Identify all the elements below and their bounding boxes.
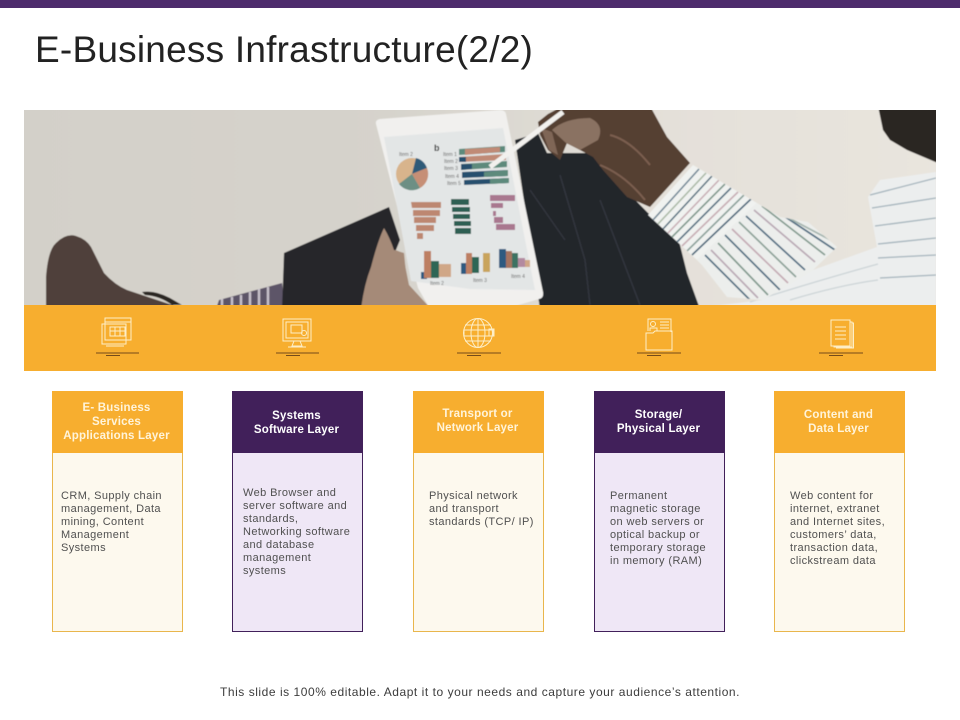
card body: Physical network (429, 490, 518, 502)
card: systems software (232, 391, 363, 632)
tablet labels: Item 3 (473, 278, 487, 284)
card body: and transport (429, 503, 499, 515)
shirt cuff (648, 165, 757, 260)
card: transport or network (413, 391, 544, 632)
card header: Services (92, 416, 141, 428)
card body: mining, Content (61, 516, 144, 528)
card header: Data Layer (808, 423, 869, 435)
trousers: near leg (282, 207, 400, 309)
boot (46, 235, 184, 309)
wall (20, 106, 940, 309)
tiny icon captions (96, 353, 863, 356)
card header: Systems (272, 410, 321, 422)
tablet labels: Item 4 (445, 174, 459, 180)
icon: application window (102, 318, 131, 346)
card header: Physical Layer (617, 423, 700, 435)
card: content and data (774, 391, 905, 632)
tablet labels: Item 2 (430, 281, 444, 287)
pie chart (396, 158, 428, 190)
footer note: This slide is 100% editable. Adapt it to your needs and capture your audience’s attention. (220, 685, 740, 699)
right hand (538, 106, 690, 207)
stylus (490, 112, 563, 167)
card body: and Internet sites, (790, 516, 885, 528)
salmon bars (411, 202, 441, 239)
card body: transaction data, (790, 542, 878, 554)
sock (216, 283, 285, 309)
tablet screen (384, 128, 535, 290)
trousers: torso and far leg (515, 133, 700, 309)
card body: on web servers or (610, 516, 704, 528)
card header: Content and (804, 409, 873, 421)
card: e-business services (52, 391, 183, 632)
card: storage physical (594, 391, 725, 632)
card body: and database (243, 539, 314, 551)
card body: management, Data (61, 503, 161, 515)
column bars (421, 249, 530, 279)
card body: standards, (243, 513, 298, 525)
icon: desktop monitor (283, 319, 311, 347)
card header (413, 391, 544, 453)
tablet labels: Item 3 (444, 166, 458, 172)
card header: E- Business (82, 402, 151, 414)
shirt sleeve (697, 203, 840, 300)
card body: optical backup or (610, 529, 700, 541)
card body: in memory (RAM) (610, 555, 702, 567)
card header: Storage/ (635, 409, 682, 421)
card body: server software and (243, 500, 347, 512)
card body: clickstream data (790, 555, 876, 567)
tablet labels: Item 5 (447, 181, 461, 187)
card body (610, 490, 706, 567)
top bar (0, 0, 960, 8)
photo: tablet in hands (24, 110, 936, 305)
card header (594, 391, 725, 453)
card body: Systems (61, 542, 106, 554)
card header: Transport or (442, 408, 513, 420)
icon: globe (464, 318, 494, 348)
card body: management (243, 552, 311, 564)
card body: magnetic storage (610, 503, 701, 515)
tablet labels: Item 1 (443, 152, 457, 158)
card body (790, 490, 885, 567)
card header (774, 391, 905, 453)
stacked bars (459, 146, 509, 185)
card body (429, 490, 534, 528)
left fingers over tablet (390, 250, 431, 309)
card body: Web Browser and (243, 487, 336, 499)
card body: internet, extranet (790, 503, 880, 515)
card body: Management (61, 529, 129, 541)
icon: folder with profile (646, 319, 672, 350)
card body: Web content for (790, 490, 873, 502)
card header (52, 391, 183, 453)
tablet body (376, 110, 543, 309)
card body: standards (TCP/ IP) (429, 516, 534, 528)
card body: customers’ data, (790, 529, 877, 541)
card header: Applications Layer (63, 430, 170, 442)
card body (243, 487, 350, 577)
card body: Networking software (243, 526, 350, 538)
card body: Permanent (610, 490, 667, 502)
tablet labels: Item 2 (399, 152, 413, 158)
card body: temporary storage (610, 542, 706, 554)
title: E-Business Infrastructure(2/2) (35, 29, 533, 70)
shirt back (722, 172, 936, 305)
card body: systems (243, 565, 286, 577)
left hand (361, 228, 431, 309)
orange band with icons (24, 305, 936, 371)
card body (61, 490, 162, 554)
card header: Network Layer (437, 422, 518, 434)
green bars (451, 199, 471, 234)
tablet labels (399, 152, 525, 287)
pink bars (490, 195, 515, 230)
letter b: b (434, 143, 440, 153)
icon: documents (831, 320, 854, 348)
hair (878, 106, 940, 164)
card header (232, 391, 363, 453)
card header: Software Layer (254, 424, 339, 436)
card body: CRM, Supply chain (61, 490, 162, 502)
tablet labels: Item 2 (444, 159, 458, 165)
tablet labels: Item 4 (511, 274, 525, 280)
